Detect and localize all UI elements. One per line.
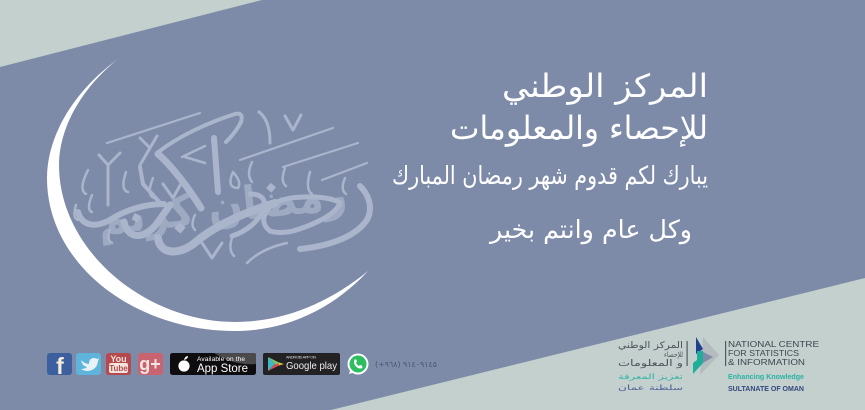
logo: Arabic organisation name: تعزيز المعرفة [618,373,683,381]
icon: white crescent moon [47,59,368,331]
logo: Arabic organisation name: و المعلومات [618,359,683,369]
heading: organisation name: المركز الوطني [502,67,708,105]
icon: youtube: Tube [109,364,128,373]
badge: Google play: ANDROID APP ON [286,354,316,360]
logo: English organisation name: FOR STATISTICS [728,348,799,358]
text: closing wish: وكل عام وانتم بخير [488,215,692,245]
logo: Arabic organisation name [618,341,688,392]
badge: App Store: App Store [197,361,248,375]
badge: App Store [170,353,256,375]
logo: centre mark [693,337,719,375]
icon: youtube [106,353,131,375]
icon: youtube: You [110,354,127,364]
logo: English organisation name: & INFORMATION [728,357,805,367]
logo: English organisation name [725,339,819,393]
icon: facebook [47,353,72,379]
logo: English organisation name: NATIONAL CENTRE [728,339,819,349]
badge: Google play [263,353,340,375]
logo: Arabic organisation name: للإحصاء [664,351,683,359]
icon: facebook: f [56,353,64,379]
logo: Arabic organisation name: سلطنة عمان [618,384,683,392]
heading: organisation name: للإحصاء والمعلومات [450,109,708,147]
logo: Arabic organisation name: المركز الوطني [618,341,683,351]
text: greeting line: يبارك لكم قدوم شهر رمضان المبارك [392,161,708,191]
top-left light corner [0,0,262,67]
icon: whatsapp [348,354,368,374]
calligraphy: Ramadan Kareem: رمضان كريم [95,166,349,246]
heading: organisation name [450,67,708,147]
logo: English organisation name: SULTANATE OF OMAN [728,386,804,393]
text: phone number: (+٩٦٨) ٩١٤٠٩١٤٥ [375,360,437,369]
icon: twitter [76,353,101,375]
logo: English organisation name: Enhancing Knowledge [728,372,804,381]
badge: App Store: Available on the [197,356,245,363]
badge: Google play: Google play [286,360,338,372]
calligraphy: Ramadan Kareem [74,112,370,263]
bottom-right light corner [331,278,865,410]
icon: google plus: g+ [139,354,161,374]
